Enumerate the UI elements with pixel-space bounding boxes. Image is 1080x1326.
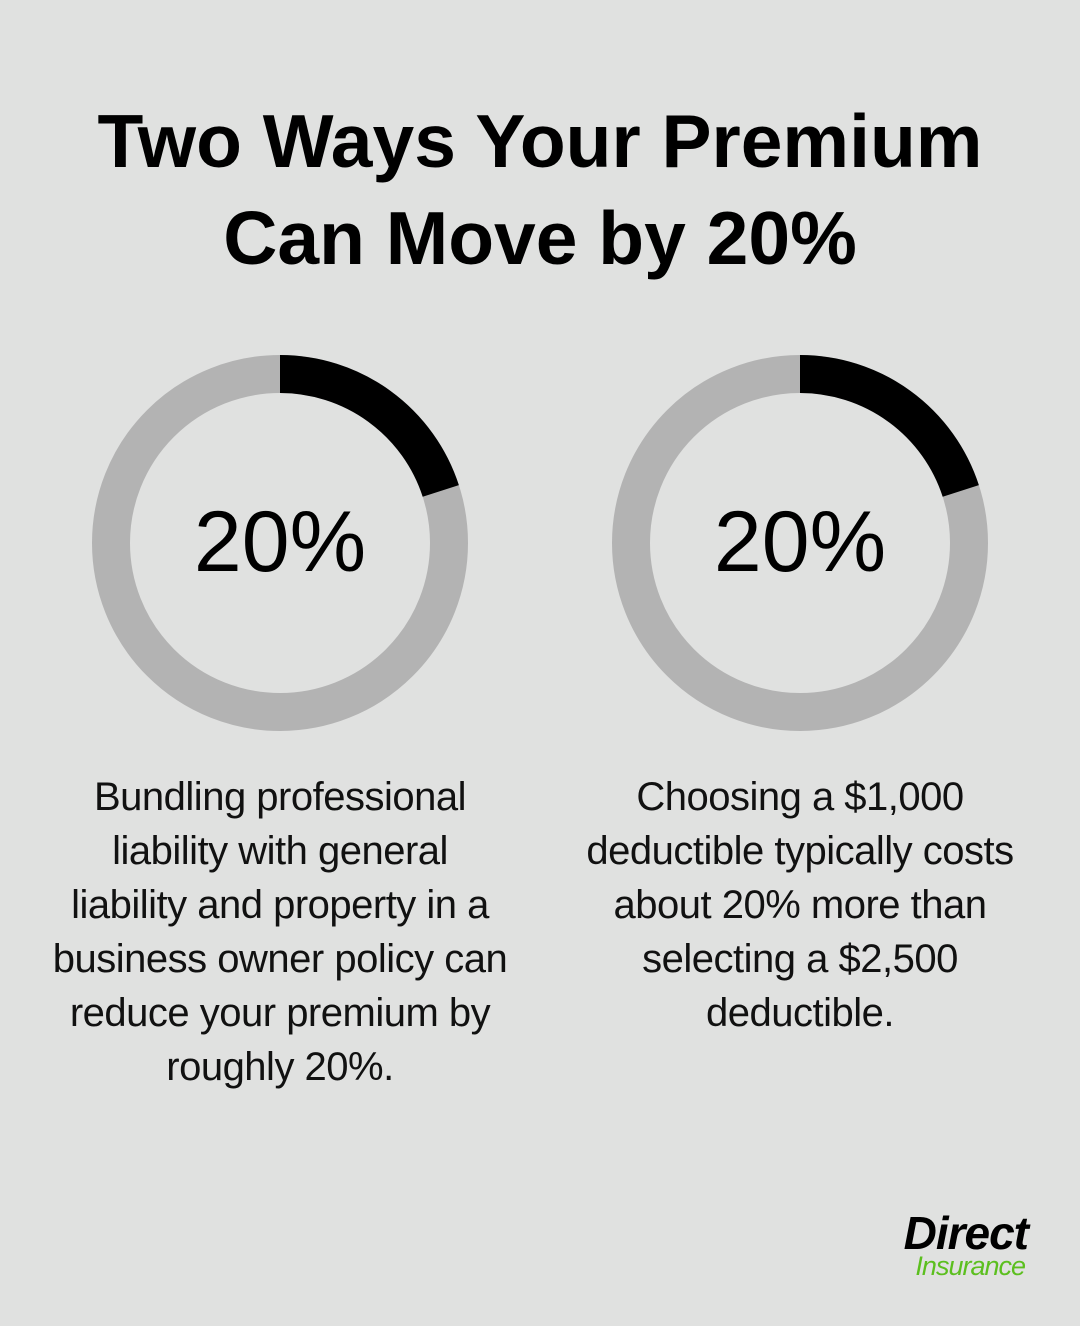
text: bundling description	[53, 775, 507, 1089]
text: deductible description: deductible typically costs	[586, 829, 1014, 873]
text: deductible description: Choosing a $1,000	[636, 775, 964, 819]
donut chart: right: 20%	[714, 494, 886, 590]
text: bundling description: roughly 20%.	[166, 1045, 394, 1089]
text: deductible description: about 20% more than	[614, 883, 986, 927]
donut chart: left	[92, 355, 468, 731]
logo: Insurance	[915, 1251, 1025, 1281]
text: bundling description: liability with general	[112, 829, 448, 873]
title: Can Move by 20%	[223, 196, 857, 280]
text: deductible description	[586, 775, 1014, 1035]
text: bundling description: Bundling professional	[94, 775, 466, 819]
text: bundling description: reduce your premium by	[70, 991, 490, 1035]
text: deductible description: selecting a $2,500	[642, 937, 958, 981]
text: deductible description: deductible.	[706, 991, 894, 1035]
logo	[904, 1207, 1030, 1281]
text: bundling description: liability and property in a	[71, 883, 489, 927]
donut chart: left: 20%	[194, 494, 366, 590]
donut chart: right	[612, 355, 988, 731]
title	[98, 99, 982, 280]
logo: Direct	[904, 1207, 1028, 1259]
title: Two Ways Your Premium	[98, 99, 982, 183]
text: bundling description: business owner policy can	[53, 937, 507, 981]
